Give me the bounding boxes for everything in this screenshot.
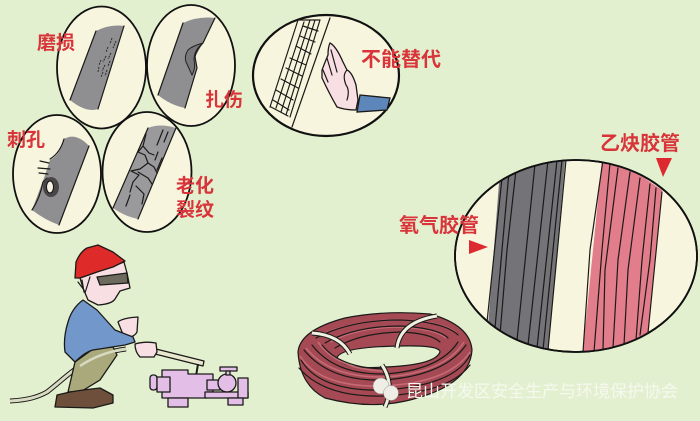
circle: stab hole damage <box>13 115 101 233</box>
torch <box>155 349 204 366</box>
label: ageing cracks: 老化 <box>176 175 214 197</box>
circle: ageing cracks damage <box>102 112 192 232</box>
arrow: to acetylene hose <box>656 158 672 177</box>
watermark text: 昆山开发区安全生产与环境保护协会 <box>406 382 678 401</box>
label: cut: 扎伤 <box>205 89 243 111</box>
mesh hose <box>270 18 330 127</box>
hose <box>10 349 126 401</box>
boots <box>55 388 113 408</box>
hair <box>78 277 90 293</box>
sleeve <box>357 95 390 112</box>
acetylene hose <box>584 163 662 351</box>
hand <box>322 43 358 110</box>
front hand <box>135 342 157 357</box>
label: oxygen hose: 氧气胶管 <box>399 213 479 237</box>
oxygen hose <box>488 161 565 348</box>
watermark logo <box>373 378 398 400</box>
circle: cannot substitute <box>253 15 399 136</box>
label: wear: 磨损 <box>37 32 75 54</box>
worker with torch <box>10 245 204 408</box>
label: ageing cracks: 裂纹 <box>176 198 214 221</box>
hose coil <box>298 313 472 407</box>
coil ties <box>312 316 437 407</box>
label: acetylene hose: 乙炔胶管 <box>600 131 680 155</box>
label: stab: 刺孔 <box>7 129 45 151</box>
circle: hose colours <box>455 150 697 360</box>
legs <box>68 347 117 392</box>
label: cannot substitute: 不能替代 <box>361 48 441 71</box>
head <box>80 262 130 305</box>
raised fist <box>118 317 138 337</box>
helmet <box>75 245 125 278</box>
torso <box>64 300 135 362</box>
hose over legs <box>80 349 126 366</box>
circle: wear damage <box>57 6 146 128</box>
arrow: to oxygen hose <box>469 240 488 254</box>
pink cutting tool <box>150 367 248 407</box>
circle: puncture cut damage <box>147 5 235 126</box>
goggles <box>97 273 128 285</box>
